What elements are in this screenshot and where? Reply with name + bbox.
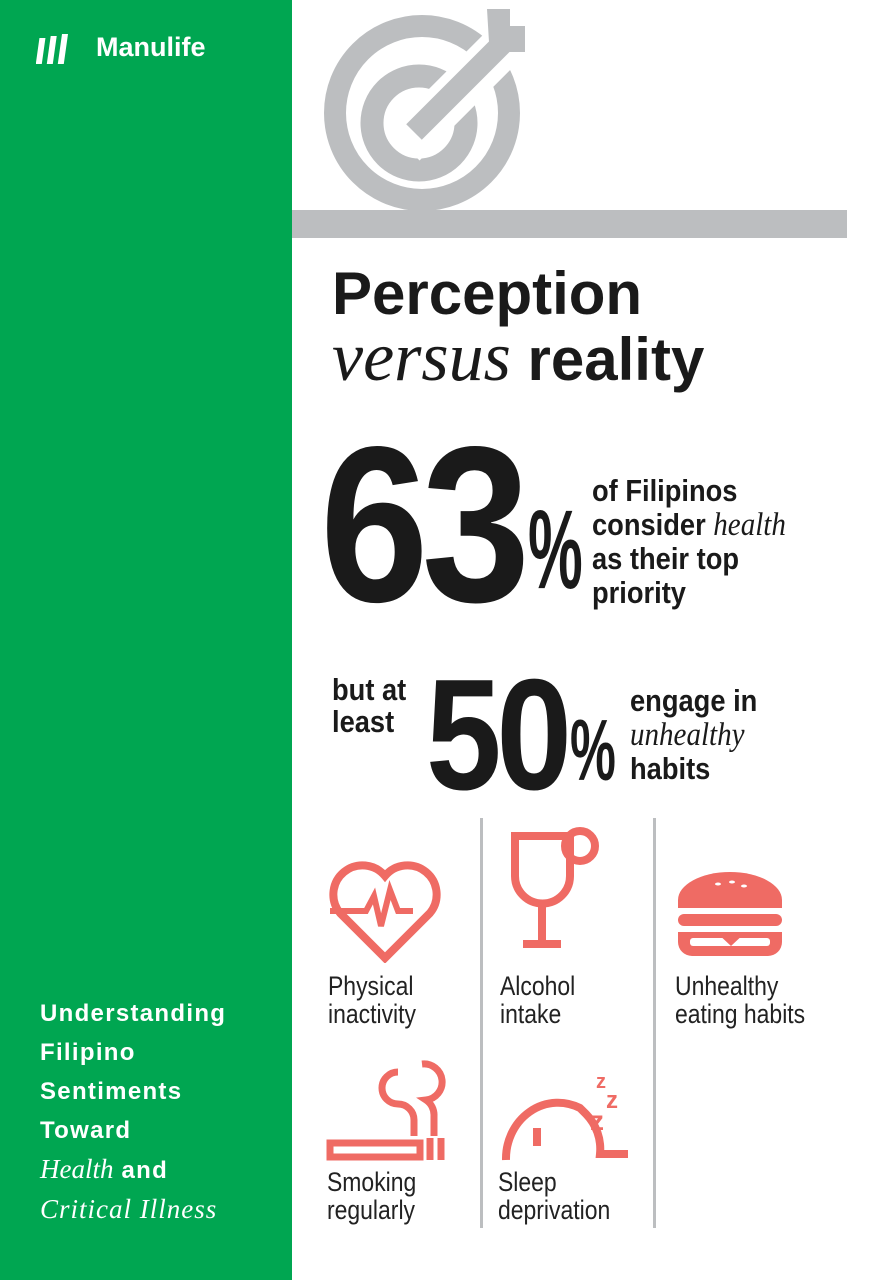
icon: sleep: z xyxy=(606,1087,618,1114)
label: alcohol xyxy=(500,971,575,1029)
label: sleep: deprivation xyxy=(498,1195,610,1225)
subtitle text: Filipino xyxy=(40,1039,136,1066)
panel: green sidebar xyxy=(0,0,292,1280)
stat: 50%: % xyxy=(570,703,616,799)
stat: 50%: 50 xyxy=(426,647,567,823)
title xyxy=(332,260,704,396)
stat: 50%: habits xyxy=(630,751,710,786)
label: alcohol: Alcohol xyxy=(500,971,575,1001)
icon: heart xyxy=(329,861,441,963)
stat: 63%: consider health xyxy=(592,507,786,543)
logo: Manulife xyxy=(96,32,206,62)
label: physical: Physical xyxy=(328,971,413,1001)
label: sleep xyxy=(498,1167,610,1225)
stat: 50%: least xyxy=(332,704,394,739)
stat: 63%: as their top xyxy=(592,541,739,576)
stat: 50%: but at xyxy=(332,672,406,707)
icon: cigarette xyxy=(326,1060,446,1160)
stat: 50%: unhealthy xyxy=(630,717,745,753)
subtitle text: Understanding xyxy=(40,1000,226,1027)
label: smoking xyxy=(327,1167,416,1225)
logo xyxy=(36,32,206,64)
title: Perception xyxy=(332,260,642,327)
label: eating xyxy=(675,971,805,1029)
label: physical: inactivity xyxy=(328,999,416,1029)
icon: sleep: z xyxy=(596,1071,606,1093)
label: eating: Unhealthy xyxy=(675,971,778,1001)
label: eating: eating habits xyxy=(675,999,805,1029)
subtitle text: Toward xyxy=(40,1117,131,1144)
subtitle text: Health and xyxy=(40,1154,168,1184)
stat: 50%: engage in xyxy=(630,683,757,718)
stat: 63%: of Filipinos xyxy=(592,473,737,508)
label: sleep: Sleep xyxy=(498,1167,557,1197)
title: versus reality xyxy=(332,319,704,396)
subtitle text: Critical Illness xyxy=(40,1194,217,1224)
icon: burger xyxy=(678,872,782,956)
label: alcohol: intake xyxy=(500,999,561,1029)
label: smoking: regularly xyxy=(327,1195,415,1225)
stat: 63% xyxy=(320,401,786,649)
label: smoking: Smoking xyxy=(327,1167,416,1197)
subtitle text: Sentiments xyxy=(40,1078,182,1105)
icon: glass xyxy=(511,827,599,948)
icon: target with arrow xyxy=(292,9,847,238)
stat: 63%: % xyxy=(528,487,583,612)
icon: sleep: z xyxy=(590,1105,604,1136)
stat: 63%: 63 xyxy=(320,401,523,649)
label: physical xyxy=(328,971,416,1029)
stat: 63%: priority xyxy=(592,575,686,610)
stat: 50% xyxy=(332,647,757,823)
icon: sleep xyxy=(502,1071,628,1160)
subtitle text xyxy=(40,1000,226,1224)
